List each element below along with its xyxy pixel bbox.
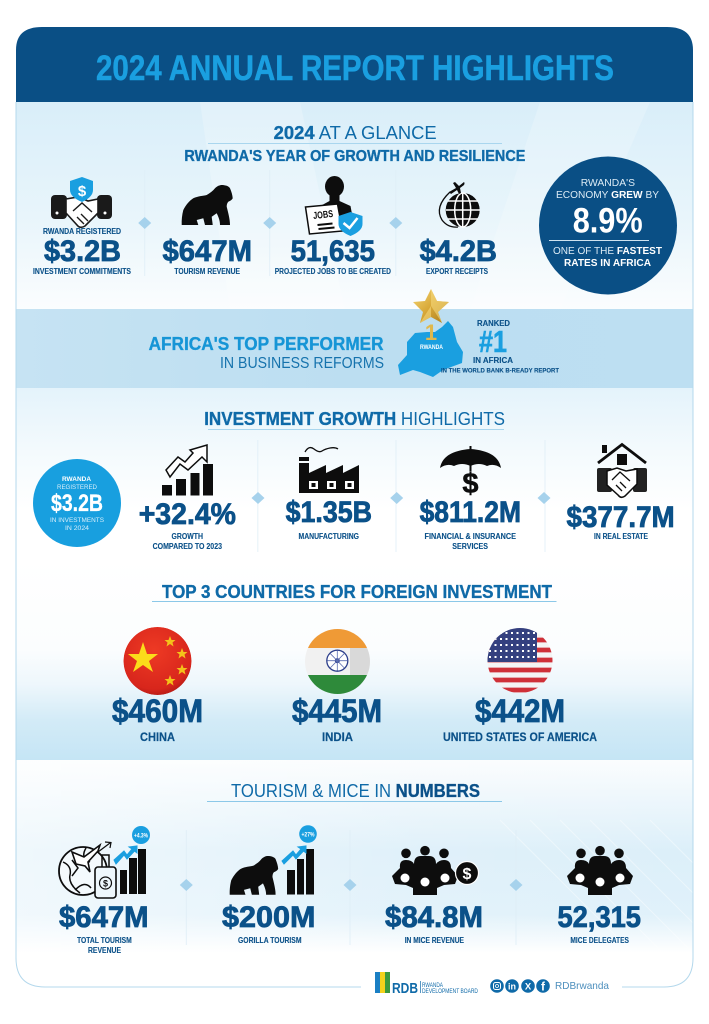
diamond separator bbox=[538, 492, 550, 504]
header bar bbox=[16, 27, 693, 102]
social media icons and handle: RDBrwanda bbox=[555, 980, 609, 992]
callout: rwanda registered 3.2B: REGISTERED bbox=[57, 484, 97, 491]
country: India: $445M bbox=[292, 693, 382, 729]
map of Rwanda with star: RWANDA bbox=[420, 345, 444, 351]
country: United States: $442M bbox=[475, 693, 565, 729]
icon: USA flag bbox=[486, 627, 554, 695]
ranked number one: IN THE WORLD BANK B-READY REPORT bbox=[441, 368, 559, 375]
stat: MICE delegates: MICE DELEGATES bbox=[570, 936, 630, 945]
stat: investment commitments: INVESTMENT COMMITMENTS bbox=[33, 267, 132, 276]
country: India: INDIA bbox=[322, 730, 353, 744]
social media icons and handle: X bbox=[525, 982, 532, 992]
social media icons and handle: f bbox=[541, 980, 546, 994]
icon: meeting people with dollar: $ bbox=[463, 866, 472, 883]
stat: investment commitments bbox=[33, 177, 132, 276]
callout: rwanda registered 3.2B: IN 2024 bbox=[65, 525, 89, 532]
icon: growth chart bbox=[162, 445, 213, 496]
section background: investment growth bbox=[16, 388, 692, 468]
diamond separator bbox=[390, 492, 403, 504]
stat: MICE revenue: $84.8M bbox=[385, 901, 483, 934]
country: India bbox=[292, 628, 382, 744]
stat: manufacturing: $1.35B bbox=[286, 496, 372, 529]
country: China: CHINA bbox=[140, 730, 175, 744]
stat: financial and insurance: SERVICES bbox=[452, 542, 489, 551]
map of Rwanda with star: 1 bbox=[425, 320, 437, 345]
callout: economy growth bbox=[539, 156, 677, 294]
social media icons and handle bbox=[490, 979, 609, 994]
logo: Rwanda Development Board: DEVELOPMENT BOARD bbox=[422, 989, 479, 995]
stat: investment commitments: $3.2B bbox=[44, 235, 121, 268]
callout: economy growth: RWANDA'S bbox=[581, 177, 635, 189]
callout: rwanda registered 3.2B: $3.2B bbox=[51, 490, 103, 517]
heading: at a glance: 2024 AT A GLANCE bbox=[274, 123, 437, 143]
section background: at a glance bbox=[16, 102, 693, 310]
stat: manufacturing: MANUFACTURING bbox=[298, 532, 359, 541]
stat: real estate: $377.7M bbox=[566, 501, 675, 534]
stat: export receipts bbox=[420, 182, 497, 276]
diamond separator bbox=[138, 217, 151, 229]
logo: Rwanda Development Board: RWANDA bbox=[422, 983, 443, 989]
stat: tourism revenue: TOURISM REVENUE bbox=[174, 267, 241, 276]
callout: rwanda registered 3.2B bbox=[33, 459, 121, 547]
stat: financial and insurance bbox=[420, 446, 521, 551]
stat: MICE delegates bbox=[558, 846, 641, 945]
country: United States: UNITED STATES OF AMERICA bbox=[443, 730, 597, 744]
stat: growth: COMPARED TO 2023 bbox=[153, 542, 222, 551]
stat: jobs bbox=[275, 176, 391, 276]
country: United States bbox=[443, 627, 597, 744]
map of Rwanda with star bbox=[398, 289, 463, 377]
heading: Africa's top performer: IN BUSINESS REFORMS bbox=[220, 355, 384, 372]
stat: MICE revenue: IN MICE REVENUE bbox=[405, 936, 465, 945]
stat: tourism revenue: $647M bbox=[162, 235, 252, 268]
stat: growth bbox=[139, 445, 236, 551]
icon: globe, luggage and growth bars bbox=[59, 826, 150, 898]
heading: investment growth highlights: INVESTMENT GROWTH HIGHLIGHTS bbox=[204, 409, 505, 429]
icon: India flag bbox=[304, 628, 372, 696]
stat: MICE delegates: 52,315 bbox=[558, 901, 641, 934]
social media icons and handle: in bbox=[508, 982, 516, 992]
stat: investment commitments: RWANDA REGISTERED bbox=[43, 227, 121, 236]
ranked number one: #1 bbox=[479, 324, 507, 359]
callout: rwanda registered 3.2B: RWANDA bbox=[62, 476, 91, 483]
section background: tourism bbox=[16, 772, 692, 942]
country: China bbox=[112, 627, 203, 744]
country: China: $460M bbox=[112, 693, 203, 729]
stat: manufacturing bbox=[286, 448, 372, 541]
icon: umbrella with dollar: $ bbox=[462, 468, 479, 500]
stat: total tourism revenue bbox=[59, 826, 150, 955]
stat: gorilla tourism bbox=[222, 825, 317, 945]
ranked number one: IN AFRICA bbox=[473, 356, 513, 365]
icon: meeting people bbox=[567, 846, 633, 895]
diamond separator bbox=[389, 217, 402, 229]
logo: Rwanda Development Board bbox=[375, 972, 479, 997]
stat: total tourism revenue: $647M bbox=[59, 901, 149, 934]
icon: factory bbox=[299, 448, 359, 493]
heading: at a glance: RWANDA'S YEAR OF GROWTH AND RESILIENCE bbox=[184, 148, 525, 165]
diamond separator bbox=[510, 879, 522, 891]
diamond separator bbox=[263, 217, 276, 229]
stat: growth: +32.4% bbox=[139, 498, 236, 531]
stat: total tourism revenue: TOTAL TOURISM bbox=[77, 936, 132, 945]
icon: gorilla with growth bars: +27% bbox=[302, 832, 315, 838]
ranking band background bbox=[16, 309, 693, 388]
icon: person with jobs paper: JOBS bbox=[313, 209, 334, 222]
stat: jobs: 51,635 bbox=[291, 235, 375, 268]
title: 2024 ANNUAL REPORT HIGHLIGHTS bbox=[96, 49, 614, 88]
callout: economy growth: 8.9% bbox=[573, 202, 643, 241]
diamond separator bbox=[344, 879, 356, 891]
icon: handshake with dollar shield: $ bbox=[78, 183, 87, 200]
stat: tourism revenue bbox=[162, 185, 252, 276]
diamond separator bbox=[252, 492, 264, 504]
stat: export receipts: $4.2B bbox=[420, 235, 497, 268]
section background: top countries bbox=[16, 661, 692, 760]
icon: globe, luggage and growth bars: +4.3% bbox=[134, 834, 149, 840]
stat: financial and insurance: FINANCIAL & INSURANCE bbox=[424, 532, 517, 541]
icon: globe, luggage and growth bars: $ bbox=[103, 878, 108, 888]
diamond separator bbox=[180, 879, 193, 891]
callout: economy growth: RATES IN AFRICA bbox=[564, 257, 651, 269]
icon: house and handshake bbox=[597, 444, 647, 497]
heading: tourism and MICE: TOURISM & MICE IN NUMBERS bbox=[231, 781, 480, 801]
ranked number one: RANKED bbox=[477, 319, 510, 328]
heading: top 3 countries: TOP 3 COUNTRIES FOR FOREIGN INVESTMENT bbox=[162, 582, 552, 602]
logo: Rwanda Development Board: RDB bbox=[392, 980, 418, 997]
stat: MICE revenue bbox=[385, 846, 483, 945]
stat: export receipts: EXPORT RECEIPTS bbox=[426, 267, 489, 276]
stat: growth: GROWTH bbox=[172, 532, 203, 541]
callout: economy growth: ONE OF THE FASTEST bbox=[553, 245, 663, 257]
ranked number one bbox=[441, 319, 559, 375]
stat: gorilla tourism: $200M bbox=[222, 901, 315, 934]
stat: financial and insurance: $811.2M bbox=[420, 496, 521, 529]
callout: economy growth: ECONOMY GREW BY bbox=[556, 189, 659, 201]
stat: gorilla tourism: GORILLA TOURISM bbox=[238, 936, 302, 945]
icon: globe with plane bbox=[439, 182, 480, 227]
callout: rwanda registered 3.2B: IN INVESTMENTS bbox=[50, 517, 105, 524]
heading: Africa's top performer: AFRICA'S TOP PERFORMER bbox=[149, 333, 384, 354]
icon: China flag bbox=[124, 627, 192, 695]
stat: real estate bbox=[566, 444, 675, 541]
stat: real estate: IN REAL ESTATE bbox=[594, 532, 649, 541]
stat: jobs: PROJECTED JOBS TO BE CREATED bbox=[275, 267, 391, 276]
stat: total tourism revenue: REVENUE bbox=[88, 946, 122, 955]
icon: gorilla bbox=[182, 185, 233, 225]
heading: Africa's top performer bbox=[149, 333, 384, 372]
heading: at a glance bbox=[184, 123, 525, 165]
